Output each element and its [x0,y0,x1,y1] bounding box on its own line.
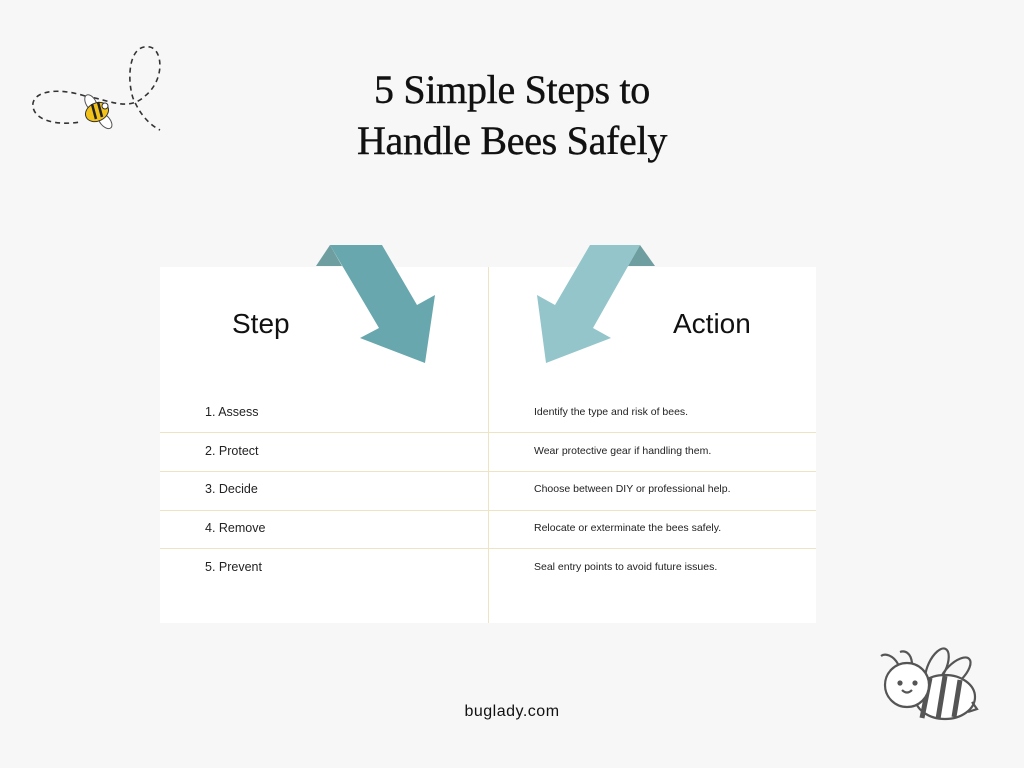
icon: cartoon bee [881,645,977,719]
column divider [488,267,489,623]
row 5: Seal entry points to avoid future issues. [534,561,717,573]
row 1: Identify the type and risk of bees. [534,406,688,418]
row 1 [205,405,688,419]
row 2: 2. Protect [205,444,258,458]
row 4 [205,521,721,535]
row 4: Relocate or exterminate the bees safely. [534,522,721,534]
row 3: Choose between DIY or professional help. [534,483,731,495]
row 4: 4. Remove [205,521,265,535]
header: Action: Action [673,308,751,339]
arrow: right [537,245,655,363]
title: Handle Bees Safely [357,118,667,163]
panel: table [160,267,816,623]
row 3: 3. Decide [205,482,258,496]
title: 5 Simple Steps to [374,67,650,112]
title [357,67,668,163]
row 5 [205,560,717,574]
arrow: left [316,245,435,363]
row 5: 5. Prevent [205,560,262,574]
row 2: Wear protective gear if handling them. [534,445,711,457]
row 1: 1. Assess [205,405,258,419]
icon: flying bee with dashed path [33,47,160,131]
footer: website: buglady.com [464,703,560,720]
header: Step: Step [232,308,290,339]
row 3 [205,482,731,496]
row 2 [205,444,711,458]
